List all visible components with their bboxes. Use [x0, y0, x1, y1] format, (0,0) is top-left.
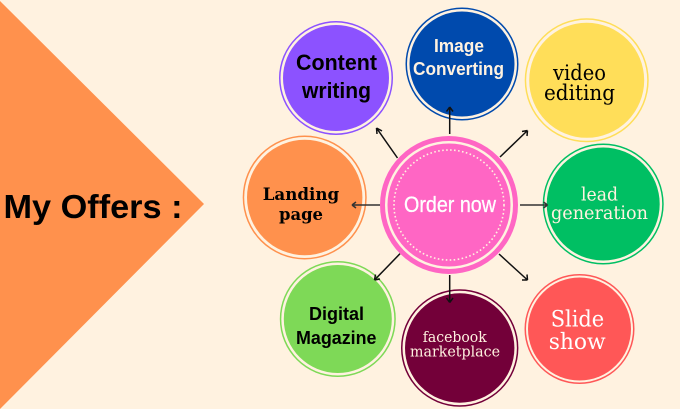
offer: content writing: writing: [301, 78, 371, 103]
arrow: to video editing: [500, 130, 528, 157]
offer: content writing: [279, 21, 393, 135]
arrow: to slide show: [499, 254, 528, 280]
offer: facebook marketplace: marketplace: [410, 345, 500, 361]
orange triangle banner with title: [0, 1, 204, 409]
offer: slide show: Slide: [551, 308, 604, 333]
arrow: to landing page: [352, 202, 380, 208]
offer: image converting: Converting: [413, 59, 504, 79]
arrows from center to each offer: [352, 107, 548, 302]
offer: landing page: Landing: [263, 185, 339, 205]
center circle: order now: [380, 136, 518, 274]
offer: landing page: [243, 136, 367, 260]
offer: facebook marketplace: [401, 289, 518, 407]
offer: video editing: [525, 18, 649, 142]
offer: slide show: show: [549, 330, 606, 355]
offer: lead generation: [543, 144, 664, 264]
title: My Offers: My Offers :: [4, 188, 182, 225]
arrow: to content writing: [376, 128, 398, 158]
offer: digital magazine: Digital: [309, 304, 364, 324]
offer: video editing: video: [552, 61, 606, 85]
arrow: to digital magazine: [374, 254, 400, 280]
offer: image converting: [406, 8, 518, 120]
center circle: order now: Order now: [404, 192, 496, 217]
offer: image converting: Image: [434, 36, 484, 56]
offer: digital magazine: [280, 261, 396, 377]
offer: slide show: [524, 274, 634, 384]
arrow: to facebook marketplace: [446, 275, 453, 302]
offer: digital magazine: Magazine: [296, 328, 376, 348]
arrow: to image converting: [446, 107, 453, 134]
offer: video editing: editing: [544, 81, 615, 105]
arrow: to lead generation: [520, 202, 548, 208]
offer: content writing: Content: [296, 50, 378, 75]
offer: lead generation: generation: [551, 202, 648, 224]
offer: landing page: page: [279, 205, 323, 225]
offer: lead generation: lead: [581, 184, 618, 206]
offer: facebook marketplace: facebook: [423, 330, 487, 346]
